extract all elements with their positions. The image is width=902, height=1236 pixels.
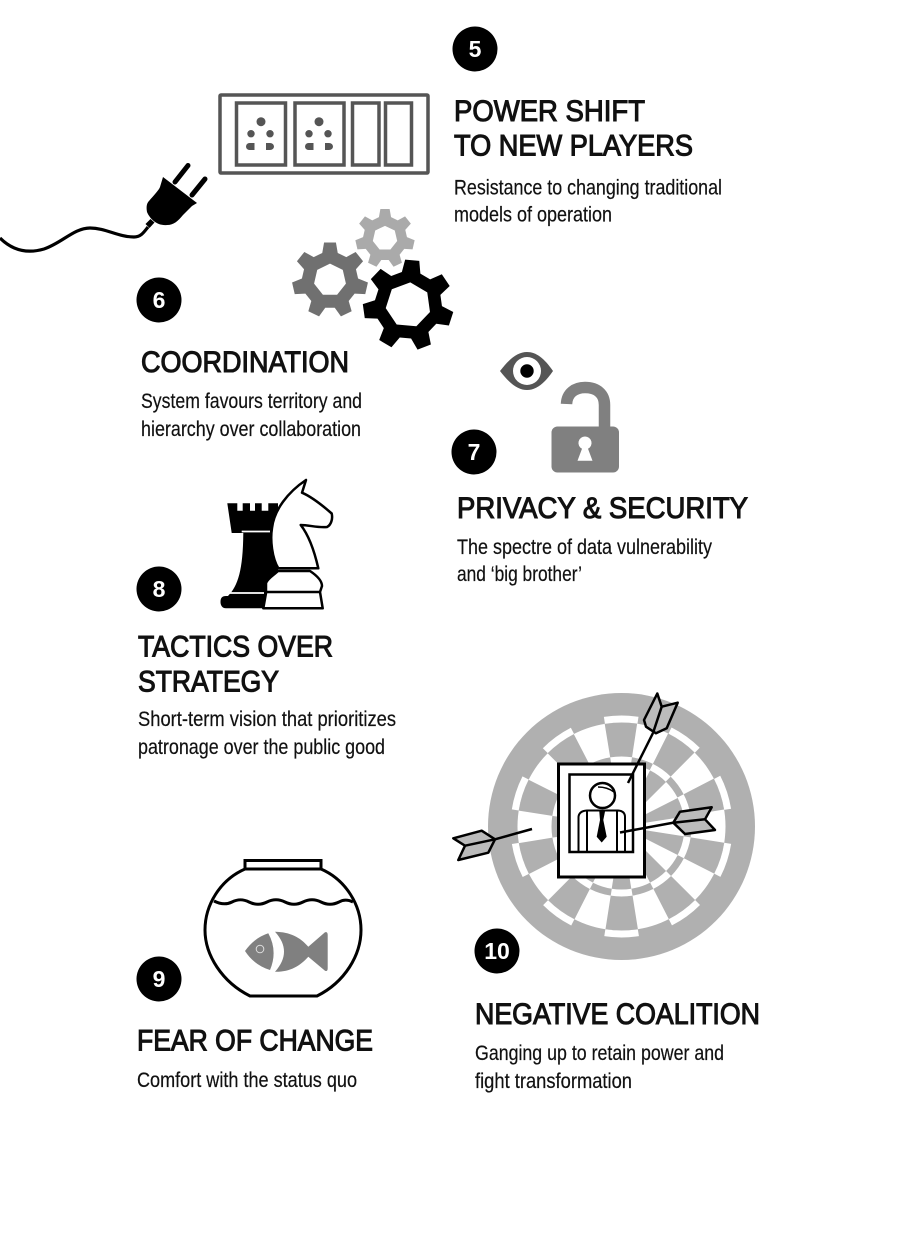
number badge 8: 8 — [153, 576, 166, 602]
icon: power socket — [220, 95, 428, 173]
heading: power shift: TO NEW PLAYERS — [454, 130, 693, 162]
text: tactics description — [138, 708, 396, 759]
heading: tactics over strategy: TACTICS OVER — [138, 630, 333, 664]
dart: top — [628, 694, 678, 783]
heading: fear of change: FEAR OF CHANGE — [137, 1024, 373, 1058]
number badge 9 — [136, 956, 182, 1002]
number badge 10 — [474, 928, 520, 974]
dart: left — [453, 829, 532, 860]
number badge 10: 10 — [484, 938, 510, 964]
text: power shift description: Resistance to changing traditional — [454, 176, 722, 200]
text: tactics description: Short-term vision that prioritizes — [138, 708, 396, 731]
number badge 6: 6 — [153, 287, 165, 313]
icon: open padlock — [552, 388, 619, 472]
number badge 9: 9 — [153, 966, 165, 992]
text: privacy description: and ‘big brother’ — [457, 563, 582, 586]
heading: tactics over strategy — [138, 630, 333, 698]
text: negative coalition description: Ganging up to retain power and — [475, 1042, 724, 1065]
dartboard — [488, 693, 755, 960]
heading: negative coalition: NEGATIVE COALITION — [475, 998, 760, 1031]
icon: fish bowl — [205, 860, 361, 996]
text: negative coalition description — [475, 1042, 724, 1093]
portrait photo — [558, 764, 644, 877]
icon: plug and cable — [0, 166, 205, 251]
number badge 5 — [452, 26, 498, 72]
number badge 8 — [136, 566, 182, 612]
heading: power shift: POWER SHIFT — [454, 95, 645, 128]
number badge 7 — [452, 430, 496, 474]
text: privacy description — [457, 536, 712, 586]
heading: coordination: COORDINATION — [141, 346, 349, 379]
number badge 7: 7 — [468, 439, 480, 465]
gear: black — [359, 256, 457, 352]
heading: tactics over strategy: STRATEGY — [138, 666, 279, 698]
heading: power shift — [454, 95, 693, 162]
number badge 6 — [136, 278, 182, 322]
icon: dartboard with portrait and darts — [453, 693, 755, 960]
gear: grey — [292, 242, 368, 316]
gear: light — [355, 209, 415, 267]
icon: eye — [500, 352, 553, 390]
text: privacy description: The spectre of data vulnerability — [457, 536, 712, 559]
text: tactics description: patronage over the public good — [138, 736, 385, 759]
icon: gears — [292, 209, 457, 352]
dart: right — [620, 807, 715, 834]
text: power shift description — [454, 176, 722, 226]
text: fear of change description: Comfort with the status quo — [137, 1069, 357, 1092]
icon: chess rook and knight — [220, 480, 332, 608]
heading: privacy and security: PRIVACY & SECURITY — [457, 492, 748, 525]
text: negative coalition description: fight transformation — [475, 1070, 632, 1093]
text: coordination description — [141, 390, 362, 441]
text: coordination description: System favours territory and — [141, 390, 362, 413]
text: coordination description: hierarchy over collaboration — [141, 418, 361, 441]
number badge 5: 5 — [469, 36, 482, 62]
text: power shift description: models of operation — [454, 204, 612, 226]
